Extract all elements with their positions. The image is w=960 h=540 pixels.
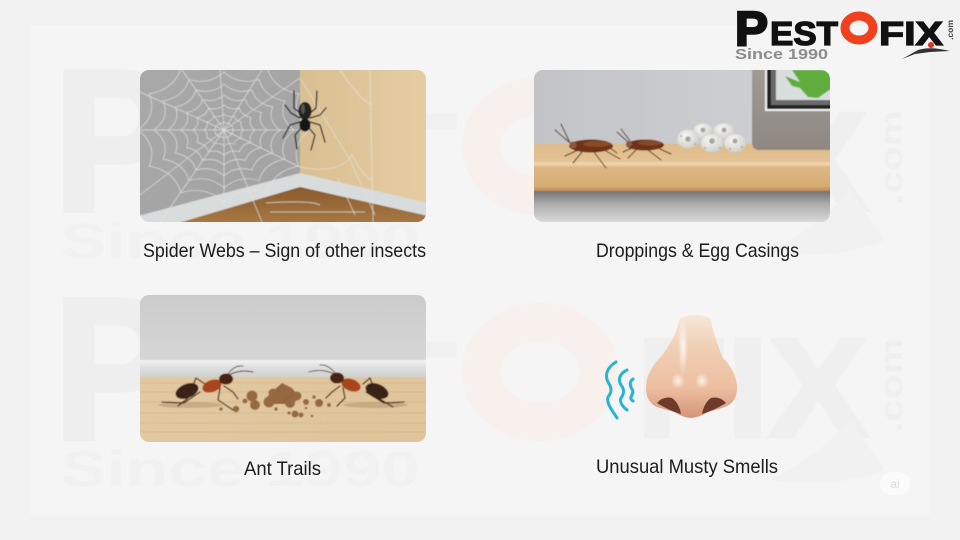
shadow beneath shelf xyxy=(532,191,832,224)
watermark: upper logo: FIX xyxy=(636,83,868,240)
AI badge: ai xyxy=(890,477,900,491)
brand logo: EST xyxy=(770,15,838,52)
caption: droppings: Droppings & Egg Casings xyxy=(596,240,799,262)
brand logo: Since 1990 xyxy=(735,46,828,63)
watermark: lower logo: P xyxy=(54,258,174,481)
brand logo: P xyxy=(735,3,768,56)
egg casings xyxy=(677,123,746,152)
right nostril xyxy=(702,398,726,414)
shelf xyxy=(532,144,832,191)
left grey wall xyxy=(138,68,300,224)
spider xyxy=(283,91,326,150)
panel: ant trails illustration xyxy=(138,293,428,444)
watermark: upper logo: Since 1990 xyxy=(60,213,420,269)
icon: human nose xyxy=(646,315,737,418)
watermark: upper logo xyxy=(54,30,909,269)
panel: droppings and egg casings illustration xyxy=(534,70,830,222)
ground shadows xyxy=(158,402,222,408)
watermark: lower logo: .com xyxy=(873,338,909,433)
baseboard xyxy=(138,173,428,224)
panel: spider webs illustration xyxy=(138,58,428,224)
dirt pile xyxy=(219,383,331,418)
cobweb xyxy=(138,58,375,222)
watermark: lower logo: FIX xyxy=(636,309,868,466)
watermark: upper logo: .com xyxy=(873,110,909,205)
caption: musty smells: Unusual Musty Smells xyxy=(596,456,778,478)
watermark: lower logo: EST xyxy=(178,311,458,468)
wall xyxy=(138,293,428,360)
caption: ant trails: Ant Trails xyxy=(244,458,321,480)
picture frame xyxy=(752,70,830,150)
brand logo xyxy=(735,3,955,63)
wood floor xyxy=(175,187,428,224)
wooden floor xyxy=(138,377,428,444)
cockroach 2 xyxy=(617,129,671,160)
left nostril xyxy=(657,398,681,414)
watermark: upper logo: EST xyxy=(178,83,458,240)
left ant xyxy=(162,366,253,410)
skirting strip xyxy=(140,362,426,378)
watermark: lower logo: Since 1990 xyxy=(60,441,420,497)
AI badge xyxy=(880,472,910,495)
brand logo: FIX xyxy=(879,15,943,52)
brand logo: .com xyxy=(946,20,955,40)
icon: smell waves xyxy=(607,362,633,418)
right tan wall xyxy=(299,70,426,203)
cockroach 1 xyxy=(555,124,620,168)
watermark: lower logo xyxy=(54,258,909,497)
caption: spider webs: Spider Webs – Sign of other insects xyxy=(143,240,426,262)
right ant xyxy=(309,365,404,407)
watermark: upper logo: P xyxy=(54,30,174,253)
wall xyxy=(534,70,752,145)
